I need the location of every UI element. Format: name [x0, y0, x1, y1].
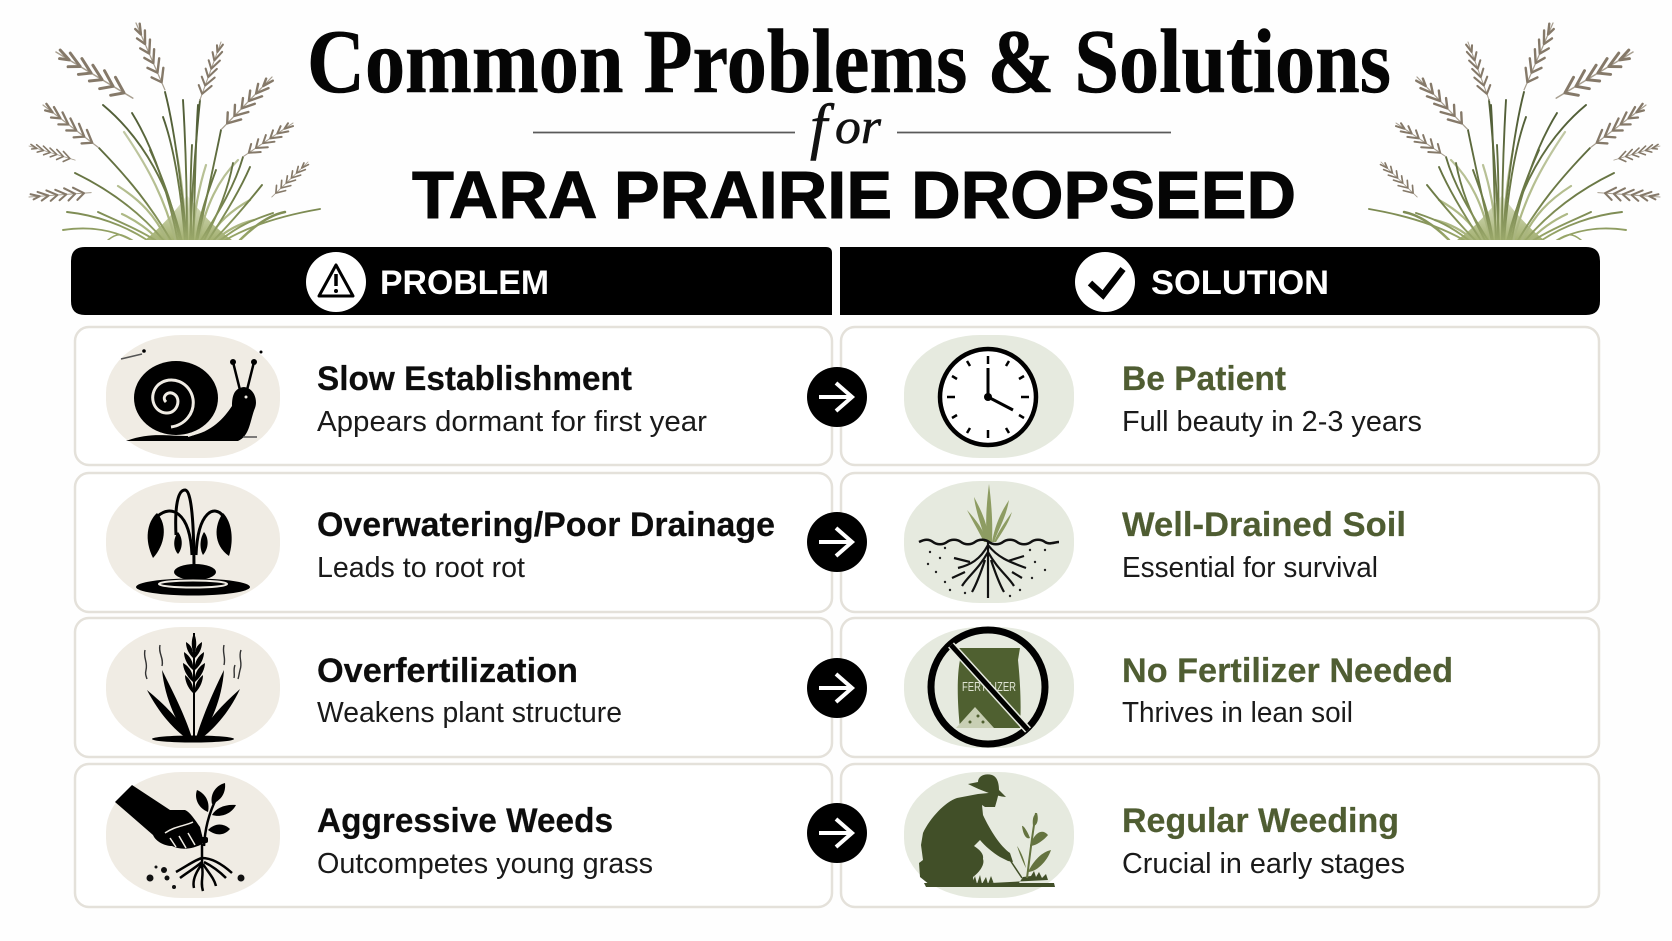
arrow: row 1 — [807, 367, 867, 427]
icon: snail — [121, 349, 262, 441]
subtitle: for — [533, 93, 1171, 161]
header: problem: PROBLEM — [380, 264, 549, 302]
heading: Overfertilization — [317, 652, 578, 690]
description: Crucial in early stages — [1122, 848, 1405, 880]
description: Essential for survival — [1122, 552, 1378, 584]
arrow: row 3 — [807, 658, 867, 718]
description: Weakens plant structure — [317, 697, 622, 729]
panel: solution row 1 — [841, 327, 1599, 465]
heading: Well-Drained Soil — [1122, 506, 1406, 544]
icon: no fertilizer — [931, 630, 1045, 744]
heading: Overwatering/Poor Drainage — [317, 506, 775, 544]
panel: problem row 4 — [75, 764, 832, 907]
icon: overfertilized plant — [145, 633, 241, 742]
title: Common Problems & Solutions — [307, 11, 1391, 112]
icon: hand pulling weed — [115, 783, 244, 891]
icon: grass with roots — [919, 484, 1059, 598]
panel: problem row 3 — [75, 618, 832, 757]
heading: Regular Weeding — [1122, 802, 1399, 840]
subtitle: for: or — [835, 98, 882, 154]
heading: No Fertilizer Needed — [1122, 652, 1453, 690]
panel: problem row 2 — [75, 473, 832, 612]
description: Thrives in lean soil — [1122, 697, 1353, 729]
icon: check — [1075, 252, 1135, 312]
description: Appears dormant for first year — [317, 406, 707, 438]
panel: solution row 2 — [841, 473, 1599, 612]
icon: warning — [306, 252, 366, 312]
panel: solution row 3 — [841, 618, 1599, 757]
subtitle: plant name: TARA PRAIRIE DROPSEED — [412, 158, 1296, 233]
icon: clock — [940, 349, 1036, 445]
header: solution — [840, 247, 1600, 315]
arrow: row 2 — [807, 512, 867, 572]
icon: gardener weeding — [919, 774, 1055, 887]
panel: problem row 1 — [75, 327, 832, 465]
header: solution: SOLUTION — [1151, 264, 1329, 302]
decoration: grass right — [1369, 20, 1661, 242]
description: Full beauty in 2-3 years — [1122, 406, 1422, 438]
description: Leads to root rot — [317, 552, 525, 584]
heading: Slow Establishment — [317, 360, 632, 398]
heading: Aggressive Weeds — [317, 802, 613, 840]
subtitle: for: f — [810, 93, 835, 161]
panel: solution row 4 — [841, 764, 1599, 907]
icon: no fertilizer: FERTILIZER — [962, 679, 1016, 694]
heading: Be Patient — [1122, 360, 1286, 398]
description: Outcompetes young grass — [317, 848, 653, 880]
decoration: grass left — [28, 20, 320, 242]
arrow: row 4 — [807, 803, 867, 863]
header: problem — [71, 247, 832, 315]
icon: wilted plant — [136, 490, 250, 596]
